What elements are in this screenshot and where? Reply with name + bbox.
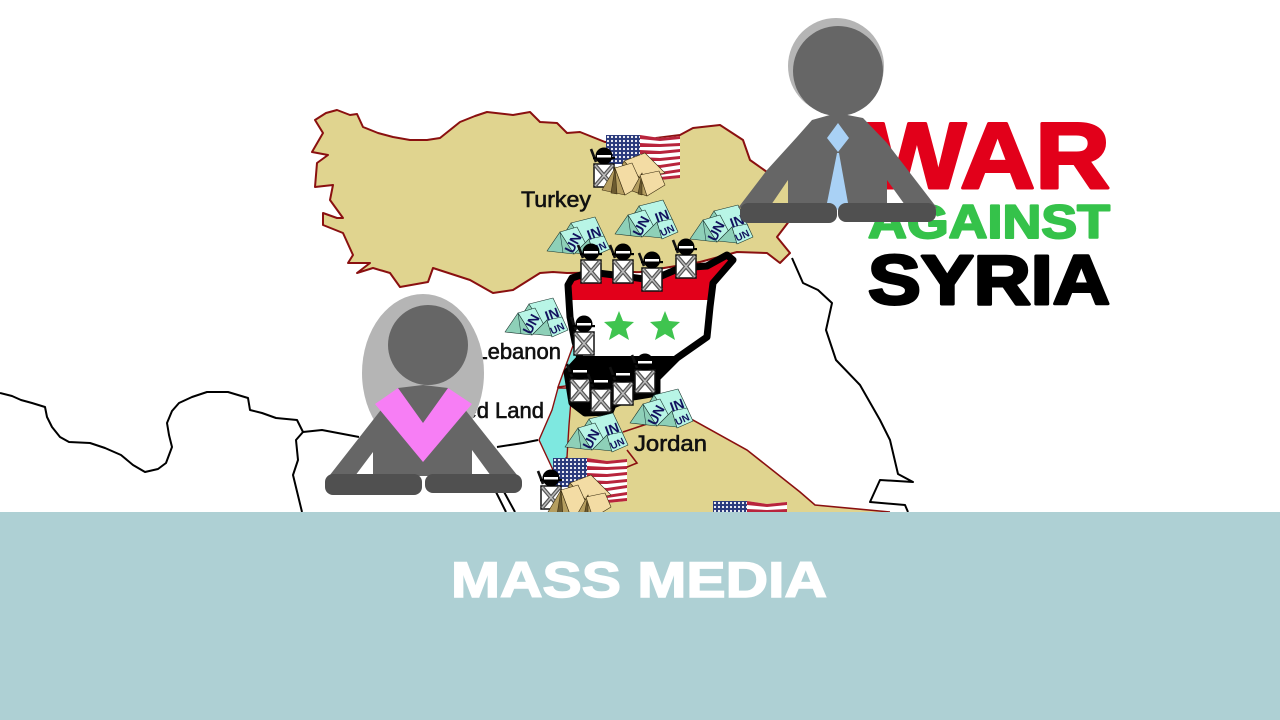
UN tents: Turkey centre [615,200,678,239]
figure: woman with pink collar [325,294,522,495]
soldiers along Syria's borders [567,238,697,412]
UN tents: Turkey centre: UN [629,213,653,239]
figure: man with blue tie [738,18,937,223]
UN tents: Jordan east [630,389,693,428]
UN tents: Lebanon: UN [519,311,543,337]
US base: Turkey [591,135,680,196]
tie [827,123,849,210]
Jordan and Saudi border [552,420,890,512]
flag star right [650,311,680,340]
country labels: Jordan [634,431,707,456]
title: War Against Syria: SYRIA [868,241,1110,319]
country: Palestine strip [539,343,580,470]
US flag: east [713,501,787,546]
UN tents: Turkey west: UN [561,230,585,256]
map [0,110,913,546]
country: Saudi Arabia and Jordan [552,392,890,512]
UN tents: Jordan east: UN [644,402,668,428]
pink collar [375,388,472,462]
country labels: Occupied Land [396,398,544,423]
country labels: Lebanon [475,339,561,364]
country: Turkey [312,110,790,293]
title: War Against Syria [868,103,1110,319]
UN tents: Turkey east: UN [734,228,752,244]
UN tents: Turkey centre: UN [659,223,677,239]
Syria flag map [560,250,740,416]
banner heading: MASS MEDIA [451,552,827,608]
UN tents: Jordan east: IN [668,395,686,415]
country labels: Turkey [521,187,591,212]
title: War Against Syria: AGAINST [868,195,1110,248]
UN tents: Lebanon: IN [543,304,561,324]
UN tents: Turkey east [690,205,753,244]
UN tents: Turkey west: IN [585,223,603,243]
desk arms [740,203,936,223]
UN tents: Turkey east: IN [728,211,746,231]
UN tents: Jordan east: UN [674,412,692,428]
desk arms [325,474,522,495]
country labels [396,187,707,456]
UN tents: Jordan west: UN [579,426,603,452]
region outlines: Africa and Iraq borders [0,258,913,512]
flag star left [604,311,634,340]
US base: south [538,458,627,518]
UN tents: Turkey east: UN [704,218,728,244]
UN tents: Lebanon [505,298,568,337]
UN tents: Jordan west: UN [609,436,627,452]
UN tents: Turkey centre: IN [653,206,671,226]
bottom banner [0,512,1280,720]
UN tents: Turkey west: UN [591,240,609,256]
UN tents: Turkey west [547,217,610,256]
UN tents: Jordan west: IN [603,419,621,439]
UN tents: Jordan west [565,413,628,452]
UN tents: Lebanon: UN [549,321,567,337]
title: War Against Syria: WAR [868,103,1110,208]
